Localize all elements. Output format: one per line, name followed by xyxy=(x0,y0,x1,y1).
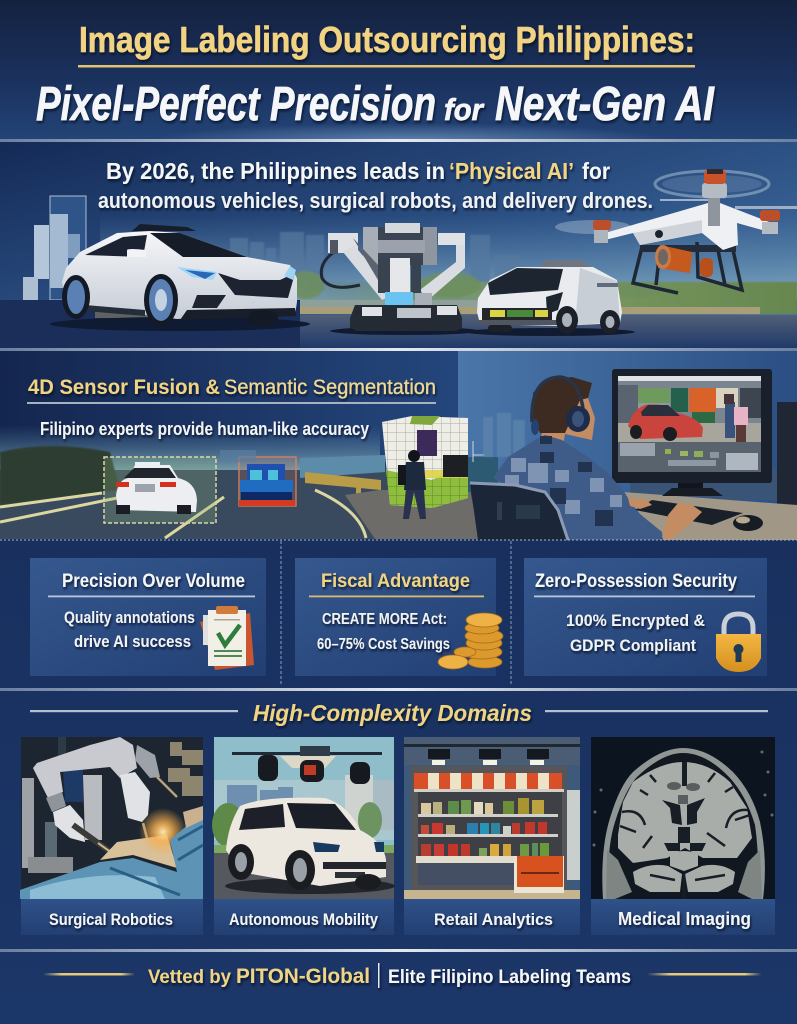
icon: checklist clipboard xyxy=(200,606,254,670)
illustration: labelled pixel cube xyxy=(382,416,468,519)
panel: fiscal advantage xyxy=(295,558,503,676)
illustration: pc tower xyxy=(777,402,797,507)
card text: drive AI success xyxy=(74,632,191,651)
illustration: keyboard and mouse xyxy=(635,500,763,531)
illustration: bounding box car xyxy=(104,457,216,523)
title line 1: Image Labeling Outsourcing Philippines: xyxy=(79,19,695,60)
card text xyxy=(317,611,450,653)
footer: Vetted by xyxy=(148,967,231,988)
awning xyxy=(414,773,562,789)
panel: autonomous mobility: Autonomous Mobility xyxy=(229,910,378,929)
counter xyxy=(416,856,564,893)
buildings left xyxy=(23,196,86,300)
panel: autonomous mobility xyxy=(212,737,395,935)
panel: precision over volume xyxy=(30,558,266,676)
icon: padlock xyxy=(716,614,761,672)
panel: surgical robotics xyxy=(20,737,203,935)
card text xyxy=(566,611,705,655)
panel: surgical robotics: Surgical Robotics xyxy=(49,910,173,929)
intro text: autonomous vehicles, surgical robots, and delivery drones. xyxy=(98,188,653,213)
intro text: for xyxy=(582,158,610,184)
card text: CREATE MORE Act: xyxy=(322,611,447,628)
illustration: annotator xyxy=(493,377,663,540)
heading: sensor fusion: Semantic Segmentation xyxy=(224,376,436,399)
illustration: wall under monitor xyxy=(630,470,777,500)
intro text: ‘Physical AI’ xyxy=(449,158,574,184)
city xyxy=(227,785,293,820)
label xyxy=(404,899,580,935)
brain tissue xyxy=(618,762,752,863)
panel: retail analytics xyxy=(404,737,580,935)
footer: PITON-Global xyxy=(236,965,370,988)
card text: GDPR Compliant xyxy=(570,636,696,655)
heading: sensor fusion xyxy=(28,376,436,399)
shelves xyxy=(414,789,564,837)
panel: sensor fusion xyxy=(0,351,797,540)
car xyxy=(226,798,386,890)
heading: sensor fusion: 4D Sensor Fusion & xyxy=(28,376,220,399)
card title: Zero-Possession Security xyxy=(535,571,737,592)
patient xyxy=(100,835,177,868)
illustration: segmented vehicle xyxy=(220,450,296,506)
illustration: monitor xyxy=(612,369,772,496)
label xyxy=(591,899,775,935)
card text: 100% Encrypted & xyxy=(566,611,705,630)
illustration: white car xyxy=(62,224,297,326)
pixelated background xyxy=(168,742,203,796)
card title: Precision Over Volume xyxy=(62,571,245,592)
lower skull xyxy=(606,850,632,899)
card text: 60–75% Cost Savings xyxy=(317,636,450,653)
card text xyxy=(64,608,195,651)
title line 2: Next-Gen AI xyxy=(495,78,715,131)
intro text: By 2026, the Philippines leads in xyxy=(106,158,445,184)
subheading text: Filipino experts provide human-like accuracy xyxy=(40,418,370,439)
panel: retail analytics: Retail Analytics xyxy=(434,910,553,929)
card title: Fiscal Advantage xyxy=(321,571,470,592)
footer: Elite Filipino Labeling Teams xyxy=(388,967,631,988)
panel: medical imaging: Medical Imaging xyxy=(618,909,751,929)
grass and road xyxy=(290,282,797,314)
label xyxy=(214,899,394,935)
road scene xyxy=(0,425,498,539)
card text: Quality annotations xyxy=(64,608,195,627)
illustration: office chair xyxy=(470,483,568,540)
skull ring xyxy=(602,748,765,899)
title line 2: Pixel-Perfect Precision xyxy=(36,78,436,131)
products xyxy=(421,798,549,856)
illustration: distant city xyxy=(483,413,525,457)
icon: coin stack xyxy=(438,613,503,669)
robot arms xyxy=(33,737,177,853)
glow xyxy=(139,808,187,856)
cerebellum xyxy=(633,851,735,892)
dotted divider xyxy=(0,539,797,541)
ceiling lights xyxy=(428,749,549,765)
footer xyxy=(43,963,762,988)
panel: zero possession security xyxy=(524,558,767,676)
header band xyxy=(0,0,797,141)
illustration: delivery drone xyxy=(555,169,797,293)
drones xyxy=(232,746,382,784)
intro text xyxy=(98,158,653,213)
city skyline xyxy=(230,232,521,295)
card separators xyxy=(281,541,511,685)
ventricles and sulci xyxy=(620,762,750,899)
heading: high-complexity domains: High-Complexity Domains xyxy=(253,700,532,726)
illustration: desk xyxy=(623,492,797,540)
panel: physical AI hero xyxy=(0,142,797,348)
illustration: delivery van xyxy=(477,260,622,334)
title line 2: for xyxy=(444,92,485,127)
label xyxy=(21,899,203,935)
illustration: surgical robot xyxy=(321,223,465,331)
drape xyxy=(20,812,203,899)
illustration: hands xyxy=(628,498,702,540)
panel: medical imaging xyxy=(591,737,775,935)
left tower and stand xyxy=(22,778,73,873)
